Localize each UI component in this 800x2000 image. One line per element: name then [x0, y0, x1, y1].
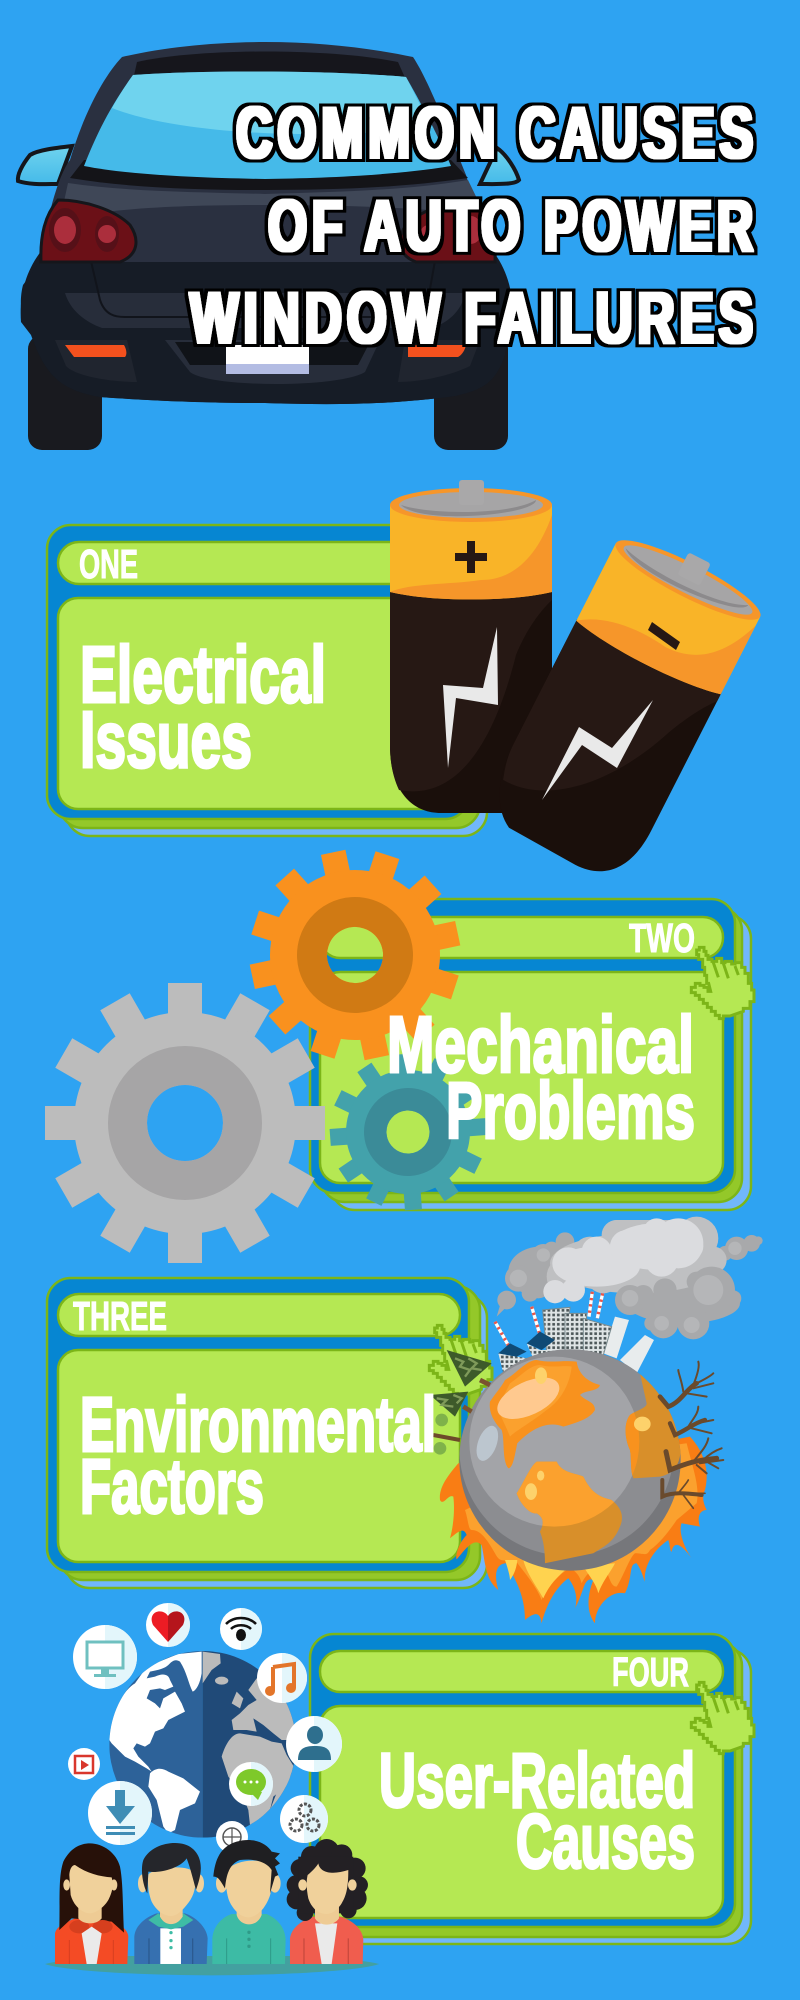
- person: man in teal: [212, 1840, 286, 1964]
- icon: chat bubble: [229, 1762, 273, 1806]
- title: [190, 93, 758, 359]
- icon: music bubble: [257, 1653, 307, 1703]
- icon: gears bubble: [280, 1795, 328, 1843]
- globe: [459, 1341, 681, 1571]
- illustration: burning planet: [430, 1217, 763, 1623]
- panel: user-related causes: [310, 1634, 754, 1944]
- pine trees: [430, 1350, 492, 1455]
- label: two: TWO: [629, 915, 695, 961]
- label: four: FOUR: [612, 1649, 689, 1695]
- heading: environmental factors: Environmental: [80, 1382, 436, 1468]
- illustration: gears: [45, 823, 491, 1263]
- icon: pointer hand: [691, 947, 754, 1019]
- chimney towers: [495, 1292, 654, 1373]
- heading: electrical issues: Issues: [80, 695, 252, 784]
- heading: electrical issues: [80, 630, 326, 784]
- icon: heart bubble: [146, 1603, 190, 1647]
- icon: pointer hand: [691, 1682, 754, 1754]
- icon: grey gear: [45, 983, 325, 1263]
- person: man in blue: [134, 1843, 208, 1964]
- icon: download bubble: [88, 1781, 152, 1845]
- heading: environmental factors: Factors: [80, 1444, 264, 1530]
- world globe: [109, 1651, 297, 1838]
- label: three: THREE: [73, 1293, 167, 1339]
- panel: electrical issues: [47, 525, 487, 836]
- icon: wifi bubble: [220, 1608, 262, 1650]
- icon: teal gear: [325, 1049, 491, 1215]
- heading: electrical issues: Electrical: [80, 630, 326, 719]
- panel: environmental factors: [47, 1278, 492, 1588]
- heading: user-related causes: Causes: [516, 1799, 695, 1885]
- illustration: batteries: [390, 480, 772, 889]
- icon: positive battery: [390, 480, 552, 813]
- person: woman in coral: [287, 1839, 368, 1964]
- flames: [440, 1437, 707, 1623]
- label: one: ONE: [79, 541, 138, 587]
- icon: orange gear: [223, 823, 487, 1087]
- people: [45, 1839, 379, 1975]
- icon: small globe bubble: [216, 1821, 248, 1853]
- person: woman in red: [55, 1843, 128, 1964]
- panel: mechanical problems: [310, 899, 754, 1210]
- buildings: [498, 1307, 612, 1373]
- illustration: globe, app icons and people: [45, 1603, 379, 1975]
- heading: user-related causes: [379, 1738, 695, 1885]
- icon: user bubble: [286, 1716, 342, 1772]
- heading: environmental factors: [80, 1382, 436, 1530]
- illustration: rear view of car: [18, 42, 519, 450]
- smoke: [497, 1217, 763, 1339]
- icon: monitor bubble: [73, 1625, 137, 1689]
- dead trees: [660, 1362, 723, 1508]
- shadow under people: [45, 1956, 379, 1975]
- icon: pointer hand: [429, 1325, 492, 1397]
- icon: negative battery: [477, 521, 772, 889]
- heading: mechanical problems: [387, 1000, 695, 1155]
- heading: mechanical problems: Problems: [446, 1066, 695, 1155]
- icon: video bubble: [68, 1748, 100, 1780]
